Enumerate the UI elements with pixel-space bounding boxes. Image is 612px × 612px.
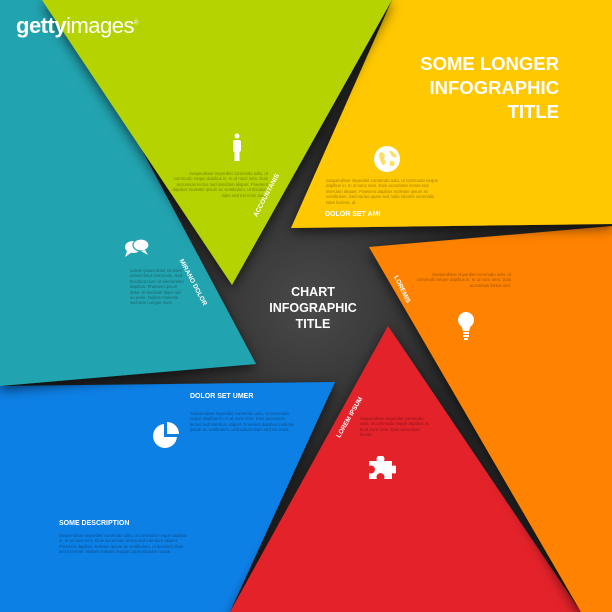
center title (269, 285, 357, 331)
logo: gettyimages® (16, 13, 138, 38)
text: red panel: Suspendisse imperdiet commodo odio, ut commodo neque dapibus in. In ut nunc sem. Duis accumsan lectus. (360, 416, 429, 437)
center title: INFOGRAPHIC (269, 301, 357, 315)
icon: bulb (458, 312, 474, 340)
petal: orange (369, 226, 612, 612)
main title: INFOGRAPHIC (430, 77, 559, 98)
center title: TITLE (296, 317, 330, 331)
icon: puzzle (369, 456, 396, 479)
label: lorem ipsum: LOREM IPSUM (335, 396, 364, 439)
text: green panel: Suspendisse imperdiet commodo odio, ut commodo neque dapibus in. In ut nunc sem. Duis accumsan lectus sed interdum aliquet. Praesent dapibus molestie ipsum ac vestibulum, ut tincidunt diam sed est enim dolor. (172, 171, 268, 198)
text: teal panel: Lorem ipsum dolor sit amet consectetur commodo. Sed tincidunt nunc et elementum dapibus. Praesent ipsum dolor. In tincidunt diam nisl eu enim. Nullam molestie sed sem congue nunc. (130, 268, 184, 305)
icon: chat (125, 240, 148, 257)
text: orange panel: Suspendisse imperdiet commodo odio, ut commodo neque dapibus in. In ut nunc sem. Duis accumsan lectus sed. (417, 272, 511, 288)
main title: TITLE (508, 101, 559, 122)
text: blue panel bottom: Suspendisse imperdiet commodo odio, ut commodo neque dapibus in. In ut nunc sem. Duis accumsan lectus sed interdum aliquet. Praesent dapibus molestie ipsum ac vestibulum, ut tincidunt diam sed est enim. Nullam sodales feugiat turpis aliquam nonae. (59, 533, 187, 554)
label: some description: SOME DESCRIPTION (59, 520, 129, 527)
center title: CHART (291, 285, 335, 299)
label: accountanis: ACCOUNTANIS (253, 173, 281, 218)
main title (420, 53, 559, 122)
petal: green (42, 0, 392, 285)
main title: SOME LONGER (420, 53, 559, 74)
icon: person (233, 134, 241, 161)
label: dolor set umer: DOLOR SET UMER (190, 393, 253, 400)
label: loremis: LOREMIS (392, 275, 411, 304)
icon: pie chart (153, 422, 179, 448)
petal: red (230, 326, 581, 612)
petal: yellow (291, 0, 612, 228)
text: yellow panel: Suspendisse imperdiet commodo odio, ut commodo neque dapibus in. In ut nunc sem. Duis accumsan lectus sed interdum aliquet. Praesent dapibus molestie ipsum ac vestibulum. Sed varius quam sed nulla lobortis venenatis. Nam laoreet, ut. (326, 178, 438, 205)
icon: globe (374, 146, 400, 172)
petal: teal (0, 0, 256, 386)
label: mirano dolor: MIRANO DOLOR (178, 258, 208, 307)
petal: blue (0, 382, 335, 612)
text: blue panel top: Suspendisse imperdiet commodo odio, ut commodo neque dapibus in. In ut nunc sem. Duis accumsan lectus sed interdum aliquet. Praesent dapibus molestie ipsum ac vestibulum, ut tincidunt diam sed est enim. (190, 411, 294, 432)
label: dolor set ami: DOLOR SET AMI (325, 211, 380, 218)
